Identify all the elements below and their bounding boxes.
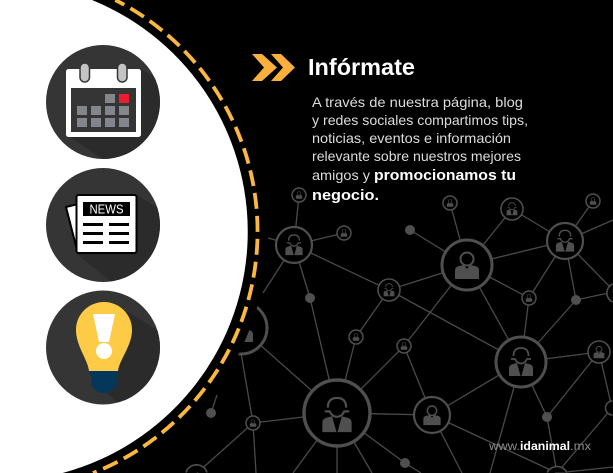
website url: www. bbox=[488, 439, 520, 453]
body text: y redes sociales compartimos tips, bbox=[312, 112, 528, 128]
white circle panel bbox=[0, 0, 248, 473]
website url: idanimal bbox=[520, 439, 570, 453]
black band masking network bbox=[0, 0, 268, 473]
icon: newspaper: NEWS bbox=[90, 202, 124, 216]
body text: negocio. bbox=[312, 187, 379, 204]
icon: newspaper bbox=[46, 168, 160, 282]
body text: A través de nuestra página, blog bbox=[312, 94, 523, 110]
body text: promocionamos tu bbox=[374, 167, 516, 184]
network nodes bbox=[186, 188, 612, 472]
icon: light bulb bbox=[46, 290, 160, 404]
website url bbox=[488, 439, 591, 453]
icon: calendar bbox=[46, 45, 160, 159]
website url: .mx bbox=[570, 439, 591, 453]
body text: noticias, eventos e información bbox=[312, 130, 511, 146]
icon: double chevron bbox=[252, 54, 295, 81]
yellow dashed ring bbox=[93, 0, 258, 473]
network diagram bbox=[186, 188, 613, 473]
body text: amigos y bbox=[312, 167, 370, 183]
network dots bbox=[206, 225, 581, 468]
network person icons bbox=[229, 192, 604, 432]
body text: relevante sobre nuestros mejores bbox=[312, 148, 521, 164]
body text bbox=[312, 94, 528, 204]
title: Infórmate bbox=[308, 54, 415, 80]
